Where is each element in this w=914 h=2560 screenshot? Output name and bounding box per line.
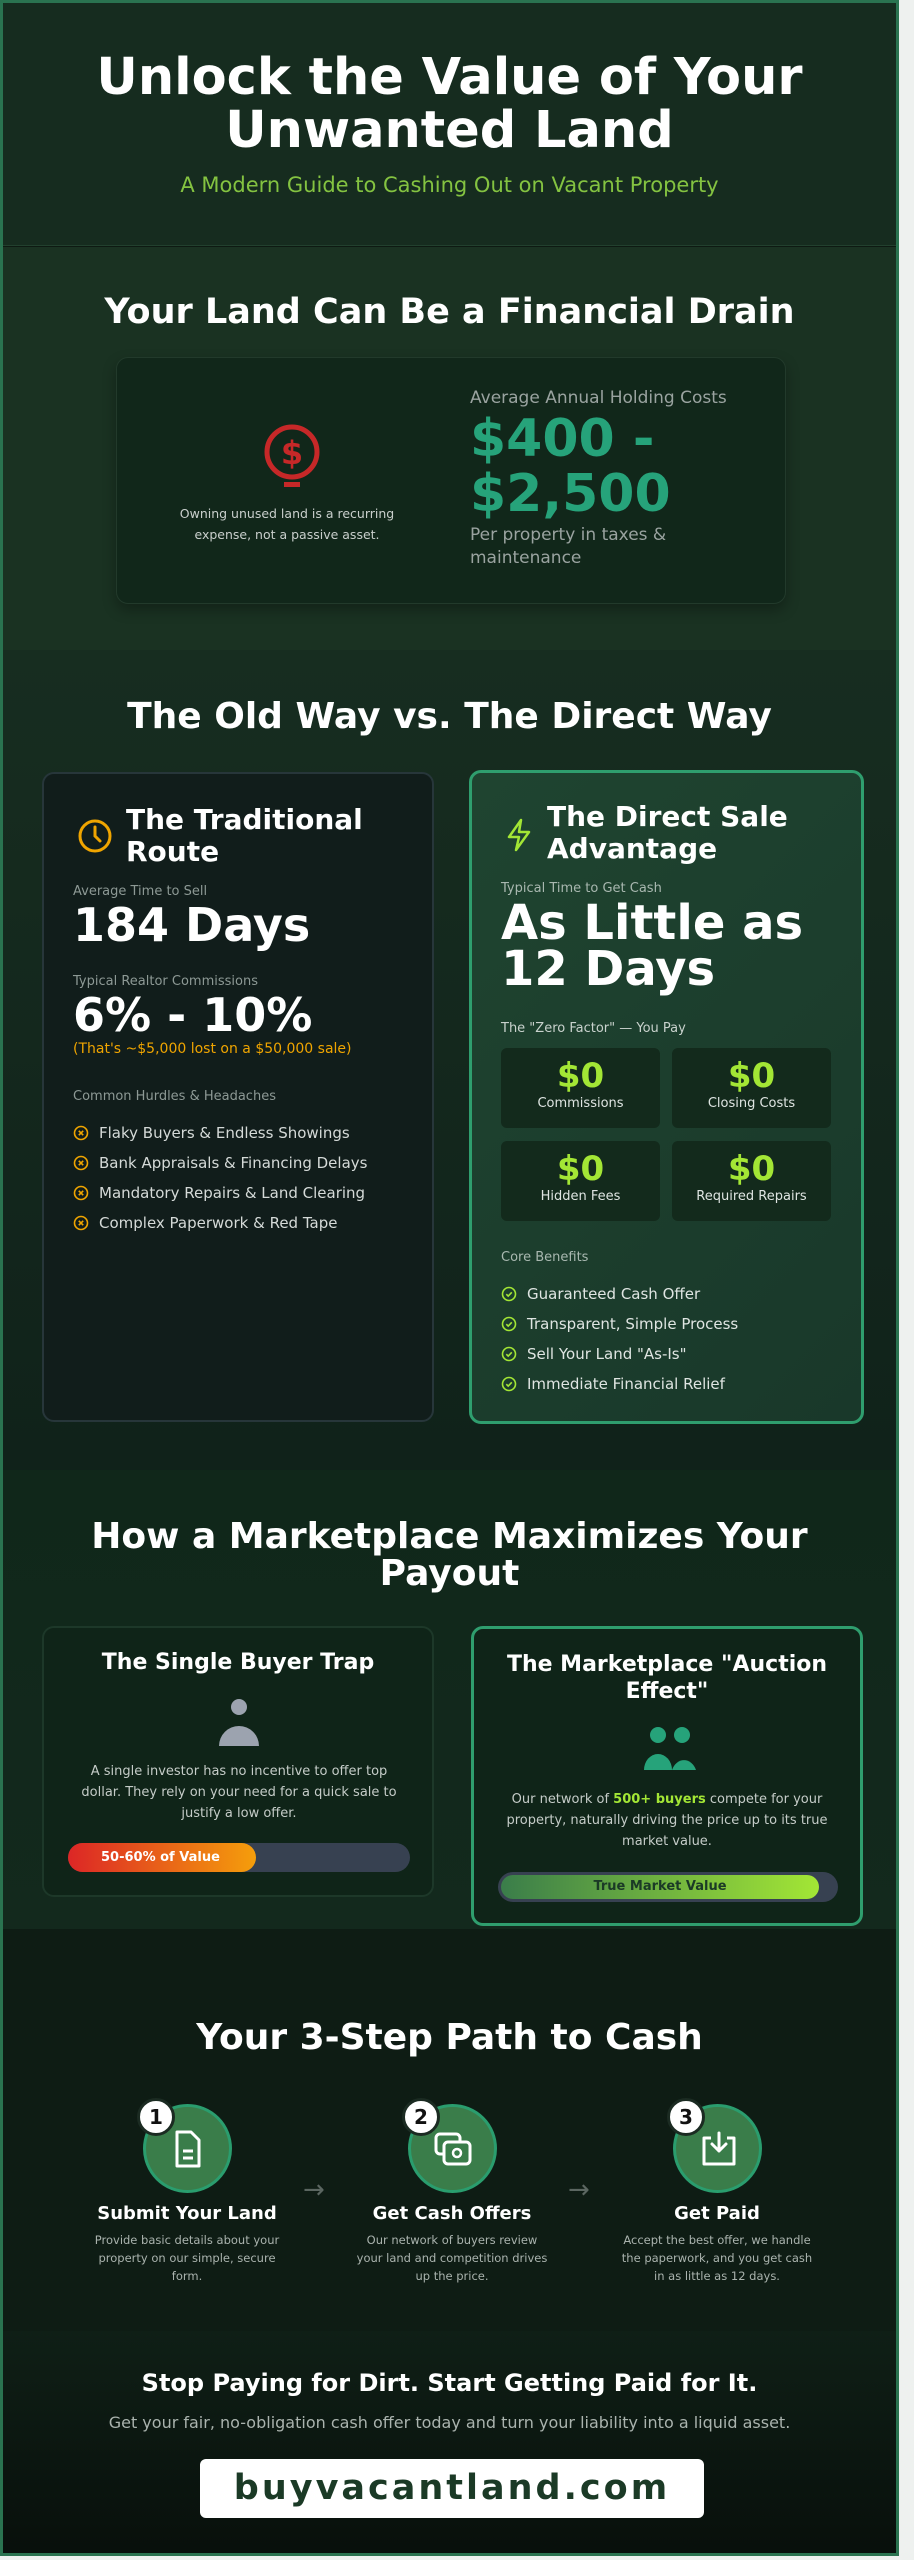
badge 1: 1 [149,2105,163,2129]
badge 2: 2 [414,2105,428,2129]
title [96,48,803,160]
zero factor grid: $0 [728,1056,775,1096]
section: financial drain [3,247,896,650]
list: benefits: Transparent, Simple Process [527,1315,738,1333]
stat: time: Typical Time to Get Cash [501,881,662,896]
list: hurdles: Common Hurdles & Headaches [73,1089,276,1104]
list: hurdles: Mandatory Repairs & Land Clearing [99,1184,365,1202]
step title: Get Cash Offers [373,2203,531,2224]
bar: 50-60%: 50-60% of Value [101,1850,220,1865]
subtitle: A Modern Guide to Cashing Out on Vacant Property [180,173,719,197]
title: Unwanted Land [225,101,674,160]
badge 2 [402,2098,440,2136]
list: benefits: Guaranteed Cash Offer [527,1285,700,1303]
zero factor grid: The "Zero Factor" — You Pay [501,1021,686,1036]
list: benefits [501,1250,738,1393]
bar: 50-60% [68,1843,410,1872]
list: hurdles [73,1089,367,1232]
stat: $400 - [470,409,654,469]
icon: red dollar: $ [281,434,303,472]
title: Unlock the Value of Your [96,48,803,107]
section: call to action [3,2331,896,2560]
title [126,803,363,868]
zero factor grid: $0 [728,1149,775,1189]
title: The Traditional [126,803,363,836]
icon: download [673,2104,762,2193]
heading: The Old Way vs. The Direct Way [127,696,772,737]
zero factor grid: $0 [557,1149,604,1189]
title: Route [126,835,219,868]
arrow 2: → [568,2175,590,2205]
stat [470,388,727,568]
heading: Payout [380,1553,519,1594]
stat: time [500,881,803,997]
list: hurdles: Flaky Buyers & Endless Showings [99,1124,350,1142]
panel: auction effect [471,1626,863,1926]
stat: time: As Little as [501,895,803,951]
icon: money [408,2104,497,2193]
step 3 [622,2098,812,2283]
stat: commissions: Typical Realtor Commissions [73,974,258,989]
zero factor grid [500,1021,831,1221]
zero factor grid: Closing Costs [708,1096,795,1111]
heading: How a Marketplace Maximizes Your [91,1516,808,1557]
zero factor grid: Hidden Fees [541,1189,620,1204]
stat: maintenance [470,548,581,568]
title [547,800,788,865]
button: website: buyvacantland.com [234,2468,670,2508]
header section [3,3,896,246]
icon: person [219,1699,259,1746]
step 2 [357,2098,547,2283]
list: benefits: Core Benefits [501,1250,588,1265]
badge 1 [137,2098,175,2136]
step 1 [95,2098,280,2283]
stat: Per property in taxes & [470,525,666,545]
bar: true market value [498,1872,838,1902]
list: benefits: Immediate Financial Relief [527,1375,725,1393]
heading [91,1516,808,1594]
zero factor grid: $0 [557,1056,604,1096]
step text: Provide basic details about your property on our simple, secure form. [95,2233,279,2283]
title: Advantage [547,832,717,865]
section: old vs direct [3,650,896,1471]
icon: clock [78,820,112,852]
cta text: Get your fair, no-obligation cash offer today and turn your liability into a liquid asset. [109,2413,790,2432]
cta heading: Stop Paying for Dirt. Start Getting Paid for It. [142,2369,757,2397]
panel: direct sale [469,770,864,1424]
stat: time: Average Time to Sell [73,884,207,899]
icon: document [143,2104,232,2193]
step text: Accept the best offer, we handle the paperwork, and you get cash in as little as 12 days. [622,2233,812,2283]
icon: two people [644,1727,696,1770]
bar: true market value: True Market Value [593,1879,727,1894]
list: benefits: Sell Your Land "As-Is" [527,1345,687,1363]
caption: Owning unused land is a recurring expense, not a passive asset. [180,506,394,542]
heading: Your Land Can Be a Financial Drain [104,292,795,332]
list: hurdles: Complex Paperwork & Red Tape [99,1214,337,1232]
zero factor grid: Required Repairs [696,1189,807,1204]
stat: time: 12 Days [501,941,715,997]
panel: single buyer [42,1626,434,1897]
stat: Average Annual Holding Costs [470,388,727,408]
stat: time: 184 Days [73,898,310,952]
stat: commissions: (That's ~$5,000 lost on a $50,000 sale) [73,1041,352,1057]
list: hurdles: Bank Appraisals & Financing Delays [99,1154,367,1172]
title [507,1652,827,1704]
button: website [200,2459,704,2518]
stat: commissions: 6% - 10% [73,988,312,1042]
panel: traditional [42,772,434,1422]
arrow 1: → [303,2175,325,2205]
icon: red dollar [264,424,320,487]
stat: $2,500 [470,464,671,524]
section: 3 steps [3,1929,896,2331]
badge 3 [667,2098,705,2136]
zero factor grid: Commissions [537,1096,624,1111]
title: The Direct Sale [547,800,788,833]
step text: Our network of buyers review your land and competition drives up the price. [357,2233,547,2283]
stat: commissions [72,974,352,1057]
icon: bolt [508,818,530,852]
card: holding costs [116,357,786,604]
text: A single investor has no incentive to offer top dollar. They rely on your need for a quick sale to justify a low offer. [81,1764,397,1821]
title: The Marketplace "Auction [507,1652,827,1677]
badge 3: 3 [679,2105,693,2129]
step title: Get Paid [674,2203,760,2224]
title: The Single Buyer Trap [102,1650,374,1675]
text: Our network of 500+ buyers compete for your property, naturally driving the price up to its true market value. [506,1792,828,1849]
section: marketplace [3,1470,896,1929]
title: Effect" [626,1679,708,1704]
step title: Submit Your Land [97,2203,277,2224]
heading: Your 3-Step Path to Cash [196,2017,703,2058]
